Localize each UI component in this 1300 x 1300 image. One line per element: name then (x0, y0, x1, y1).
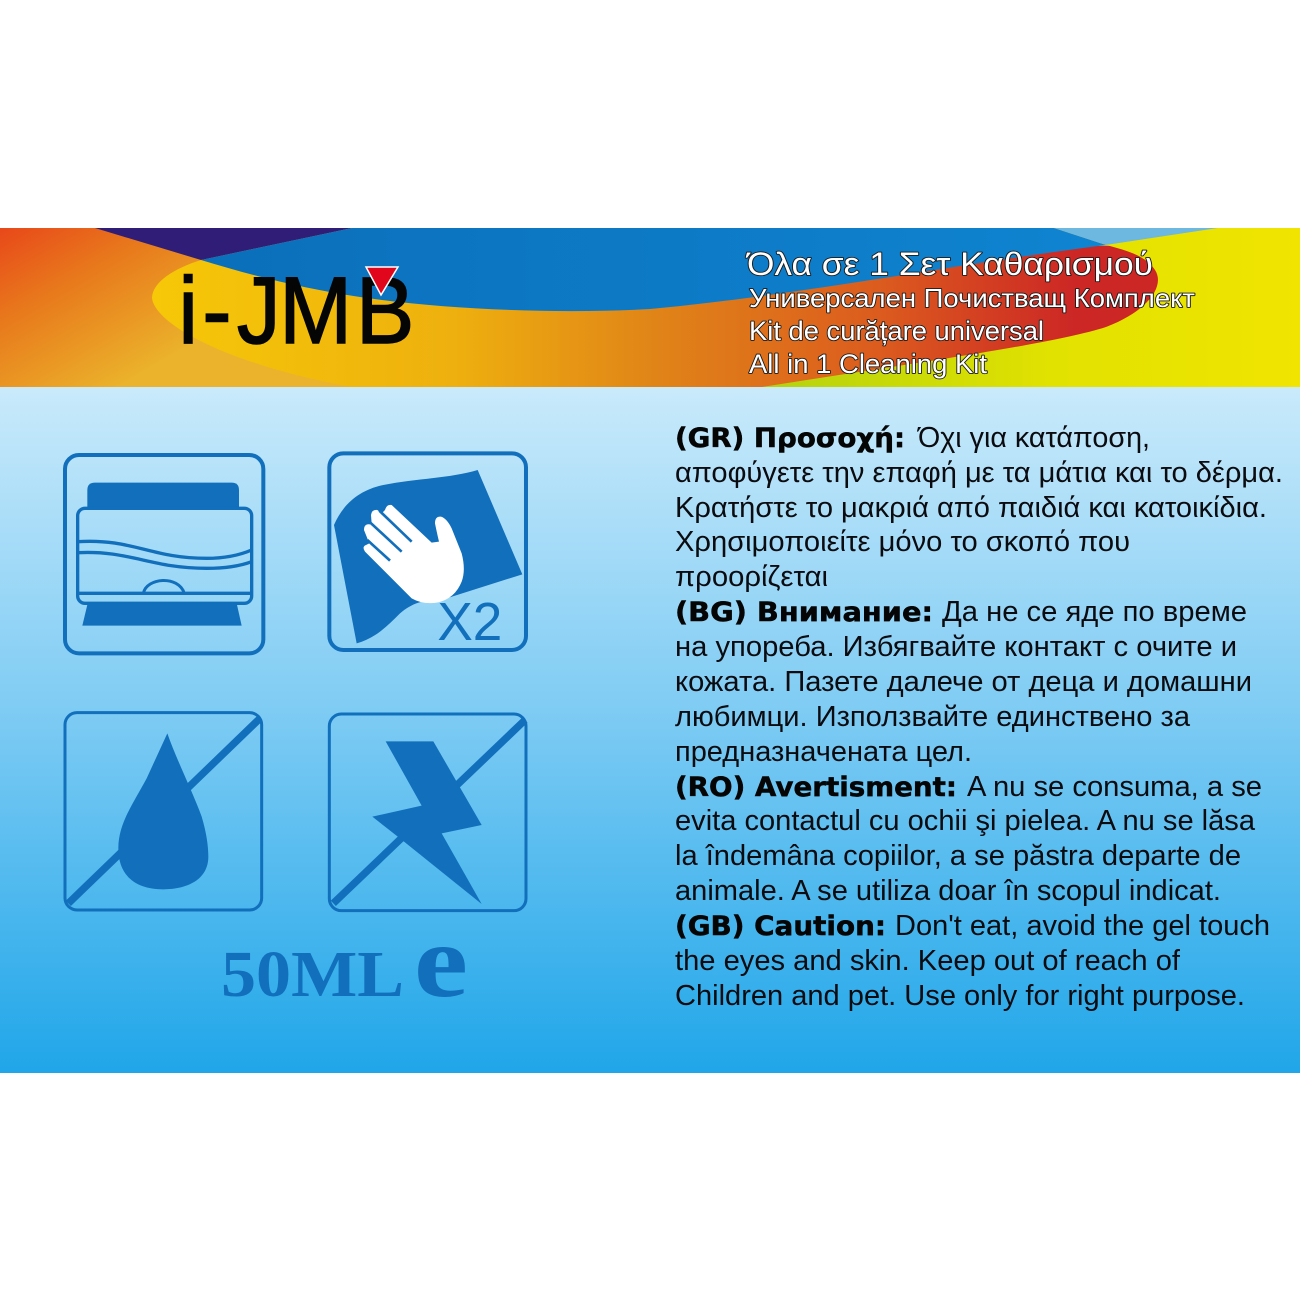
text block: Bulgarian warning: на упореба. Избягвайте контакт с очите и (675, 631, 1237, 663)
text block: Bulgarian warning: кожата. Пазете далече от деца и домашни (675, 666, 1252, 698)
panel: blue gradient body (0, 387, 1300, 1073)
panel: header banner (0, 228, 1300, 387)
logo: i-JMB: i-JMB (178, 258, 414, 364)
icon: no electricity (329, 714, 526, 911)
icon: wipe dispenser (65, 455, 263, 653)
icon: no water (65, 713, 262, 910)
label: 50ML e volume mark (221, 904, 468, 1019)
text block: Romanian warning: animale. A se utiliza doar în scopul indicat. (675, 875, 1221, 907)
icons: bottom row (65, 713, 526, 911)
text block: Greek warning: προορίζεται (675, 561, 828, 593)
icon: cloth and hand x2 (329, 453, 526, 652)
text block: Greek warning: (GR) Προσοχή: (675, 423, 905, 454)
text block: Bulgarian warning: предназначената цел. (675, 736, 972, 768)
text block: Greek warning: αποφύγετε την επαφή με τα μάτια και το δέρμα. (675, 457, 1283, 489)
text block: Bulgarian warning: Да не се яде по време (942, 596, 1247, 628)
heading: product name in four languages: Όλα σε 1 Σετ Καθαρισμού (745, 246, 1153, 282)
text block: English caution (675, 910, 1270, 1012)
text block: Romanian warning: evita contactul cu ochii şi pielea. A nu se lăsa (675, 805, 1255, 837)
text block: Romanian warning (675, 771, 1262, 907)
text block: Bulgarian warning: (BG) Внимание: (675, 597, 933, 628)
heading: product name in four languages: All in 1 Cleaning Kit (749, 349, 987, 379)
text block: Greek warning: Όχι για κατάποση, (917, 422, 1150, 454)
heading: product name in four languages (745, 246, 1195, 379)
text block: English caution: Don't eat, avoid the gel touch (895, 910, 1270, 942)
icon: cloth and hand x2: X2 (437, 593, 502, 652)
text block: English caution: (GB) Caution: (675, 911, 886, 942)
text block: English caution: Children and pet. Use only for right purpose. (675, 980, 1245, 1012)
text block: Greek warning (675, 422, 1283, 593)
text block: Bulgarian warning (675, 596, 1252, 768)
text block: Greek warning: Κρατήστε το μακριά από παιδιά και κατοικίδια. (675, 492, 1267, 524)
text block: Romanian warning: A nu se consuma, a se (967, 771, 1262, 803)
text block: Romanian warning: la îndemâna copiilor, a se păstra departe de (675, 840, 1241, 872)
text block: Romanian warning: (RO) Avertisment: (675, 772, 957, 803)
label: 50ML e volume mark: 50ML (221, 938, 404, 1011)
icons: top row (65, 453, 526, 653)
label: 50ML e volume mark: e (414, 904, 468, 1019)
text block: Greek warning: Χρησιμοποιείτε μόνο το σκοπό που (675, 526, 1130, 558)
heading: product name in four languages: Универсален Почистващ Комплект (749, 283, 1195, 313)
text block: English caution: the eyes and skin. Keep out of reach of (675, 945, 1180, 977)
heading: product name in four languages: Kit de curățare universal (749, 316, 1044, 346)
text block: Bulgarian warning: любимци. Използвайте единствено за (675, 701, 1190, 733)
